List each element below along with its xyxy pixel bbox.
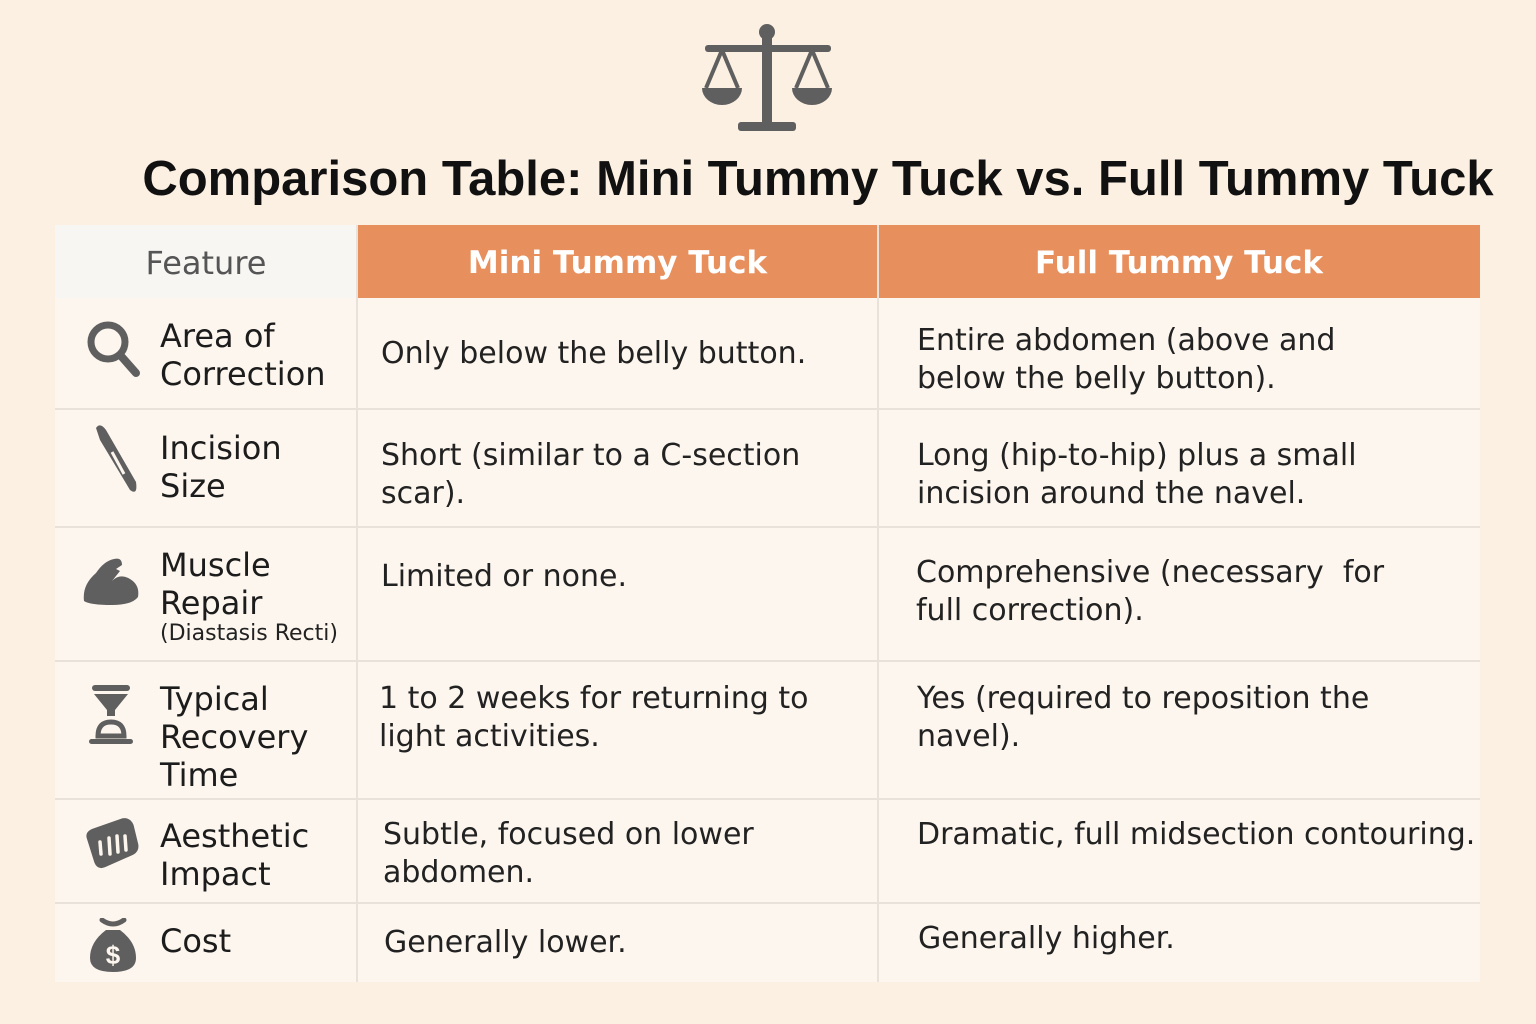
icon: contour [86,818,138,868]
row 1 full [917,323,1335,396]
row 4 feature: Recovery [160,718,308,756]
icon: muscle arm [84,558,138,605]
icon: scalpel [96,425,136,492]
row 3 full [916,555,1384,628]
row 6 full: Generally higher. [918,921,1175,956]
row 2 feature [160,429,282,505]
text: (Diastasis Recti) [160,621,338,646]
row 2 full [917,438,1357,511]
row 2 mini: Short (similar to a C-section [381,438,800,473]
header: feature [55,225,357,298]
row 4 mini [379,681,808,754]
header: full: Full Tummy Tuck [1035,245,1323,281]
row 5 feature [160,817,309,893]
row 4 full: navel). [917,719,1020,754]
row 3 full: full correction). [916,593,1144,628]
row 2 mini [381,438,800,511]
header: feature: Feature [146,244,266,282]
row 1 full: Entire abdomen (above and [917,323,1335,358]
row 4 feature [160,680,308,794]
row 6 feature: Cost [160,922,231,960]
row 5 mini: Subtle, focused on lower [383,817,754,852]
row 1 full: below the belly button). [917,361,1276,396]
table [55,225,1480,982]
row 5 mini [383,817,754,890]
row 2 mini: scar). [381,476,465,511]
row 1 mini: Only below the belly button. [381,336,806,371]
header: mini [357,225,878,298]
row 1 feature [160,317,326,393]
row 4 full [917,681,1369,754]
row 1 feature: Correction [160,355,326,393]
row 5 mini: abdomen. [383,855,534,890]
icon: scales [702,24,832,131]
icon: money bag [90,918,136,972]
row 6 mini: Generally lower. [384,925,627,960]
header: mini: Mini Tummy Tuck [468,245,767,281]
row 5 feature: Impact [160,855,271,893]
row 2 feature: Incision [160,429,282,467]
row 2 full: Long (hip-to-hip) plus a small [917,438,1357,473]
row 2 feature: Size [160,467,226,505]
icon: magnifier [88,322,140,377]
row 3 full: Comprehensive (necessary for [916,555,1384,590]
header: full [878,225,1480,298]
row 4 mini: light activities. [379,719,600,754]
icon: hourglass [89,685,133,744]
icon: money bag: $ [106,940,121,970]
row 3 feature: Repair [160,584,262,622]
row 4 feature: Typical [160,680,269,718]
row 5 full: Dramatic, full midsection contouring. [917,817,1475,852]
title: Comparison Table: Mini Tummy Tuck vs. Full Tummy Tuck [142,152,1494,206]
row 4 mini: 1 to 2 weeks for returning to [379,681,808,716]
row 2 full: incision around the navel. [917,476,1305,511]
row 3 mini: Limited or none. [381,559,627,594]
row 3 feature [160,546,271,622]
row 1 feature: Area of [160,317,275,355]
row 4 feature: Time [160,756,238,794]
row 3 feature: Muscle [160,546,271,584]
row 5 feature: Aesthetic [160,817,309,855]
row 4 full: Yes (required to reposition the [917,681,1369,716]
